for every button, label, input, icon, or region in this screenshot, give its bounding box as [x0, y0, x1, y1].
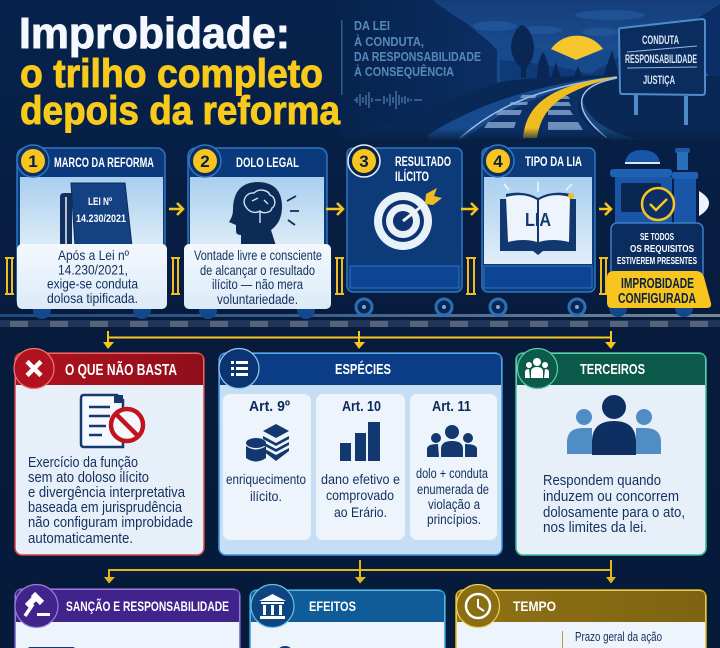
badge 4	[482, 145, 514, 177]
badge 3: 3	[359, 152, 369, 171]
wheels	[490, 299, 585, 315]
article 11 column	[410, 394, 497, 540]
step text box: Vontade livre e consciente	[194, 247, 322, 263]
panel: tempo	[456, 584, 706, 648]
title: Improbidade:	[19, 9, 290, 58]
article 11 column: Art. 11	[432, 398, 471, 415]
icon: head with brain	[229, 182, 299, 246]
road sign: CONDUTA	[642, 35, 679, 47]
badge 4: 4	[493, 152, 503, 171]
step 3: resultado ilicito	[347, 145, 462, 315]
road sign	[619, 19, 705, 125]
icon: target	[374, 188, 442, 250]
badge: gavel	[15, 584, 58, 628]
body text: e divergência interpretativa	[28, 485, 186, 501]
badge: institution	[251, 584, 294, 628]
badge: group	[518, 348, 558, 388]
wheels	[33, 301, 151, 319]
panel: terceiros	[516, 348, 706, 555]
step 1: marco da reforma: MARCO DA REFORMA	[54, 155, 154, 170]
wheels	[609, 299, 693, 317]
panel: especies: ESPÉCIES	[335, 361, 391, 378]
icon: prohibited document	[81, 395, 143, 447]
sun	[551, 36, 603, 60]
icon: open book	[500, 182, 576, 255]
divider	[341, 20, 342, 95]
step 4: tipo da lia	[482, 145, 595, 315]
badge 2	[189, 145, 221, 177]
step 3: resultado ilicito: RESULTADO	[395, 154, 451, 169]
icon: three people	[567, 395, 661, 455]
panel: efeitos	[250, 584, 445, 648]
step text box: dolosa tipificada.	[47, 290, 138, 306]
body text: induzem ou concorrem	[543, 489, 679, 505]
yellow trail	[523, 77, 617, 138]
body text	[543, 473, 685, 536]
article 10 column: ao Erário.	[334, 504, 387, 520]
condition box: SE TODOS	[640, 231, 674, 243]
panel: especies	[219, 348, 502, 555]
step 3: resultado ilicito: ILÍCITO	[395, 169, 429, 184]
article 10 column: dano efetivo e	[321, 471, 400, 487]
panel: terceiros: TERCEIROS	[580, 361, 645, 378]
subtitle	[354, 19, 481, 79]
step 1: marco da reforma	[17, 145, 167, 319]
body text: Respondem quando	[543, 473, 661, 489]
panel: sancao e responsabilidade	[15, 584, 240, 648]
article 11 column: dolo + conduta	[416, 466, 488, 481]
badge: x	[14, 348, 54, 388]
article 9 column: ilícito.	[250, 488, 282, 504]
step text box: voluntariedade.	[217, 291, 298, 307]
condition box: OS REQUISITOS	[630, 243, 694, 255]
step 2: dolo legal	[184, 145, 331, 319]
badge 1	[17, 145, 49, 177]
icon: check	[642, 188, 674, 220]
title: depois da reforma	[20, 89, 341, 133]
step 4: tipo da lia: TIPO DA LIA	[525, 154, 582, 169]
panel: efeitos: EFEITOS	[309, 598, 356, 614]
icon: document top	[28, 647, 75, 648]
subtitle: DA LEI	[354, 19, 390, 33]
body text: Prazo geral da ação	[575, 629, 662, 644]
title: o trilho completo	[20, 52, 323, 96]
railway sleepers	[484, 95, 583, 130]
header scene: night landscape with railway	[340, 0, 720, 142]
body text: Exercício da função	[28, 455, 138, 471]
connector: middle row to bottom row	[104, 560, 616, 584]
step text box: 14.230/2021,	[58, 262, 128, 278]
icon: law book: LEI Nº	[88, 196, 112, 208]
icon: sound wave	[354, 91, 422, 109]
icon: people	[427, 425, 477, 457]
article 11 column: enumerada de	[417, 482, 489, 497]
couplers	[5, 258, 608, 294]
article 11 column: violação a	[428, 497, 480, 512]
article 9 column: enriquecimento	[226, 471, 306, 487]
badge: clock	[456, 584, 500, 628]
body text	[28, 455, 193, 547]
pine trees	[511, 25, 620, 82]
step text box: de alcançar o resultado	[200, 262, 315, 278]
panel: sancao e responsabilidade: SANÇÃO E RESPONSABILIDADE	[66, 597, 229, 614]
subtitle: À CONSEQUÊNCIA	[354, 64, 454, 79]
panel: tempo: TEMPO	[513, 598, 556, 614]
connector: track to middle row	[103, 331, 616, 349]
railway track	[0, 314, 720, 327]
condition box	[611, 223, 703, 279]
icon: law book: 14.230/2021	[76, 213, 126, 225]
body text: dolosamente para o ato,	[543, 505, 685, 521]
badge 2: 2	[200, 152, 210, 171]
wheels	[356, 299, 452, 315]
wheels	[199, 301, 315, 319]
body text: sem ato doloso ilícito	[28, 470, 149, 486]
icon: open book: LIA	[525, 210, 551, 230]
panel: o que nao basta: O QUE NÃO BASTA	[65, 361, 177, 379]
article 11 column: princípios.	[427, 512, 481, 527]
body text: automaticamente.	[28, 531, 133, 547]
subtitle: À CONDUTA,	[354, 34, 424, 49]
title	[19, 9, 341, 133]
badge 1: 1	[28, 152, 38, 171]
step text box: Após a Lei nº	[58, 247, 129, 263]
icon: bars	[340, 422, 380, 461]
hills	[497, 37, 622, 90]
subtitle: DA RESPONSABILIDADE	[354, 50, 481, 64]
left mountain	[340, 0, 530, 140]
article 10 column: comprovado	[326, 487, 394, 503]
panel: o que nao basta	[14, 348, 204, 555]
badge: list	[219, 348, 259, 388]
step text box	[17, 244, 167, 309]
article 10 column: Art. 10	[342, 398, 381, 415]
step text box: exige-se conduta	[47, 276, 138, 292]
icon: coins and bills	[246, 424, 289, 462]
step text box: ilícito — não mera	[212, 276, 303, 292]
step 2: dolo legal: DOLO LEGAL	[236, 155, 299, 170]
railway bed	[428, 76, 617, 140]
body text: baseada em jurisprudência	[28, 500, 183, 516]
step text box	[184, 244, 331, 309]
badge 3	[348, 145, 380, 177]
ground	[340, 75, 720, 140]
article 9 column: Art. 9º	[249, 398, 290, 415]
icon: law book	[60, 183, 132, 246]
flow arrows between steps	[169, 203, 611, 215]
result box	[607, 271, 711, 308]
road sign: JUSTIÇA	[643, 75, 675, 87]
icon: circle top	[276, 646, 294, 648]
article 10 column	[316, 394, 405, 540]
body text: não configuram improbidade	[28, 515, 193, 531]
locomotive	[607, 148, 711, 317]
body text: nos limites da lei.	[543, 520, 647, 536]
article 9 column	[223, 394, 311, 540]
